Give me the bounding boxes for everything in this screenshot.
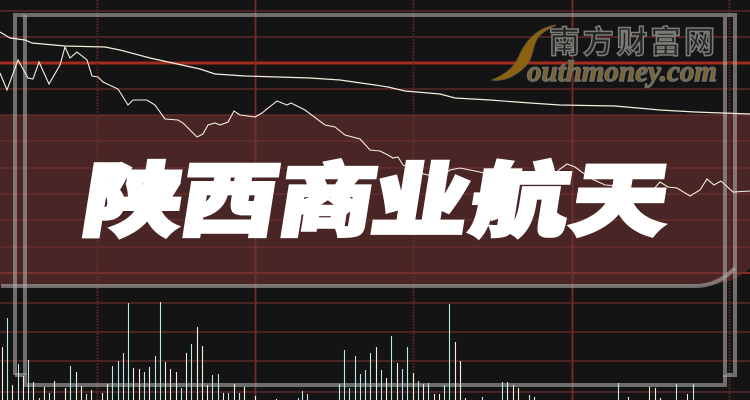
title: 航 (465, 157, 575, 246)
watermark Chinese name: 南方财富网 (549, 25, 715, 60)
chart: moving average line (0, 32, 750, 114)
title: 商 (272, 157, 382, 246)
title: 业 (366, 157, 476, 246)
icon: gold S swoosh (492, 25, 556, 80)
chart: volume bars (2, 302, 694, 400)
title (77, 157, 675, 247)
chart: price line (0, 47, 750, 196)
title: 陕 (77, 158, 189, 247)
panel: translucent title band (0, 115, 750, 286)
title: 西 (174, 157, 284, 246)
watermark Latin name: outhmoney.com (527, 55, 717, 88)
title: 天 (565, 157, 675, 246)
watermark: southmoney logo (492, 25, 717, 88)
